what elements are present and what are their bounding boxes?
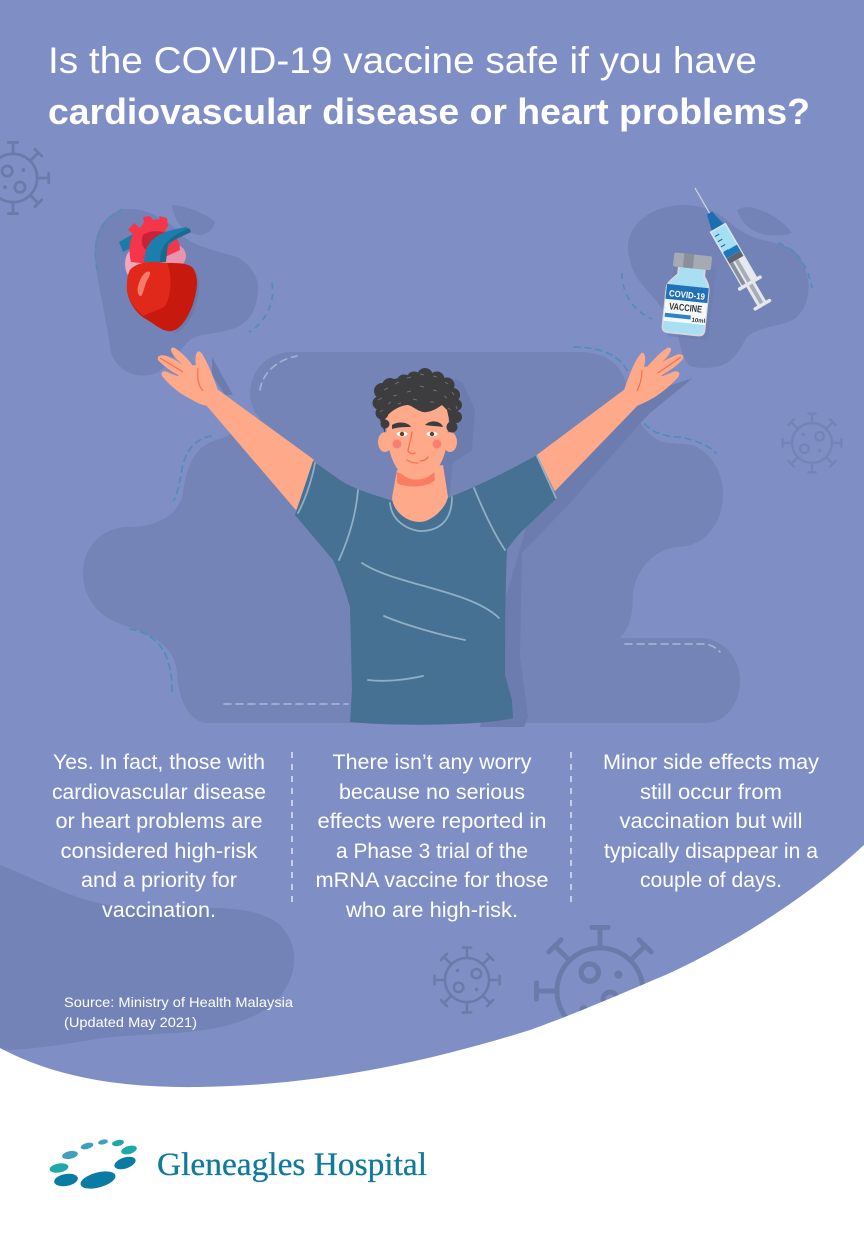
column 2 text xyxy=(316,750,548,922)
dashed accents xyxy=(130,347,720,704)
virus top-left xyxy=(0,142,49,214)
column 2 text: mRNA vaccine for those xyxy=(316,868,548,892)
cheeks xyxy=(392,440,402,448)
virus right xyxy=(783,414,841,472)
bottom-left blob xyxy=(0,865,294,1050)
left arm and hand xyxy=(158,348,313,509)
vaccine backdrop blob xyxy=(622,205,812,368)
central blob xyxy=(83,352,740,723)
logo: Gleneagles Hospital xyxy=(49,1139,427,1192)
column 1 text: or heart problems are xyxy=(56,809,262,833)
column dividers xyxy=(292,752,571,902)
hair xyxy=(372,368,462,433)
t-shirt xyxy=(295,455,557,725)
source note: (Updated May 2021) xyxy=(64,1014,197,1030)
title: Is the COVID-19 vaccine safe if you have xyxy=(48,40,757,81)
column 3 text: couple of days. xyxy=(640,868,782,892)
column 3 text: Minor side effects may xyxy=(603,750,819,774)
column 3 text: still occur from xyxy=(640,780,782,804)
person shadow xyxy=(212,357,693,727)
column 1 text: vaccination. xyxy=(102,898,216,922)
nose and mouth xyxy=(407,432,428,463)
column 2 text: who are high-risk. xyxy=(345,898,518,922)
column 3 text: typically disappear in a xyxy=(604,839,818,863)
icon: syringe xyxy=(683,181,775,313)
brows and eyes xyxy=(392,423,411,429)
face xyxy=(385,405,450,480)
person xyxy=(158,348,683,725)
virus bottom large xyxy=(534,925,654,1018)
source note: Source: Ministry of Health Malaysia xyxy=(64,994,293,1010)
column 1 text: considered high-risk xyxy=(60,839,258,863)
logo wordmark: Gleneagles Hospital xyxy=(157,1147,427,1183)
column 2 text: a Phase 3 trial of the xyxy=(336,839,528,863)
heart backdrop blob xyxy=(95,205,273,376)
column 1 text xyxy=(52,750,266,922)
vial label text: VACCINE xyxy=(669,301,703,316)
title: cardiovascular disease or heart problems? xyxy=(48,91,810,132)
logo mark xyxy=(49,1139,138,1192)
neck xyxy=(392,465,448,522)
right arm and hand xyxy=(538,348,683,490)
column 2 text: because no serious xyxy=(339,780,525,804)
column 3 text xyxy=(603,750,819,892)
column 1 text: and a priority for xyxy=(81,868,237,892)
title xyxy=(48,40,810,132)
ears xyxy=(378,432,392,452)
vial label text: COVID-19 xyxy=(669,288,705,302)
column 1 text: cardiovascular disease xyxy=(52,780,266,804)
icon: heart xyxy=(119,216,199,334)
column 3 text: vaccination but will xyxy=(620,809,802,833)
source note xyxy=(64,994,293,1030)
virus bottom small xyxy=(434,947,500,1013)
icon: vaccine vial xyxy=(662,252,717,340)
column 2 text: effects were reported in xyxy=(318,809,546,833)
vial label text: 10ml xyxy=(691,318,706,325)
column 1 text: Yes. In fact, those with xyxy=(53,750,265,774)
vial label text xyxy=(666,288,709,325)
column 2 text: There isn’t any worry xyxy=(332,750,532,774)
